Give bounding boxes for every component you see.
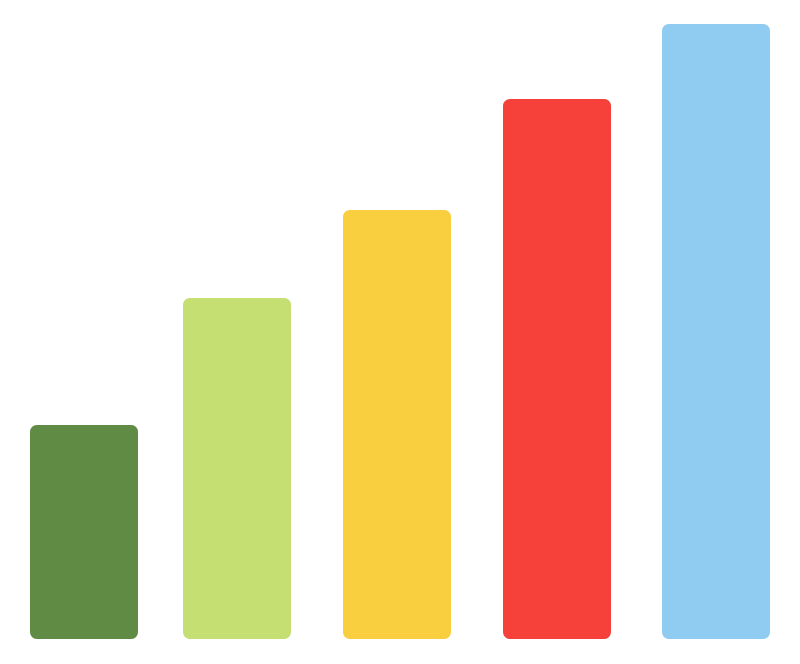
bar 5: light blue bbox=[662, 24, 770, 639]
bar 1: dark green bbox=[30, 425, 138, 639]
bar 4: red bbox=[503, 99, 611, 639]
bar 3: yellow bbox=[343, 210, 451, 639]
bar 2: light green bbox=[183, 298, 291, 639]
